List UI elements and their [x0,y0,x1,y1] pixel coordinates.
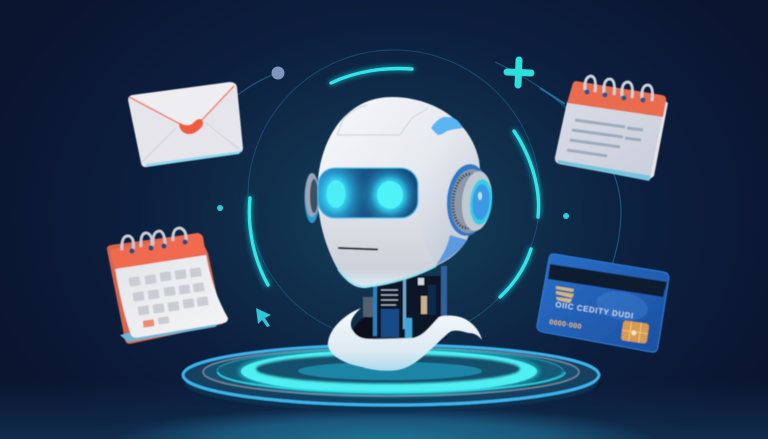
visor eye glow [316,170,412,219]
credit card icon [537,254,669,352]
calendar icon [107,228,228,344]
face plate [319,212,438,288]
left ear [304,173,320,223]
right ear [446,164,493,236]
side blue stripe [436,235,467,265]
notepad icon [555,76,668,181]
left eye [324,177,348,211]
card number: 0000·000 [549,319,582,331]
icon: left glowing dot [217,205,223,211]
card logo [556,286,574,303]
right eye [374,178,406,212]
icon: cursor arrow [256,308,271,327]
jaw glow [338,266,436,287]
blue head panel [431,117,463,135]
card text: OIIC CEDITY DUDI [555,300,634,321]
orbit rings [236,50,621,342]
visor [318,168,418,218]
robot collar [328,308,482,371]
platform [183,345,599,411]
head panel [337,105,428,135]
card chip [621,320,649,344]
envelope icon [128,82,243,167]
robot neck [352,266,447,340]
mouth [338,248,378,250]
head shell [317,97,480,288]
icon: right glowing dot [563,213,569,219]
robot [304,97,495,371]
icon: plus sign [507,60,531,85]
icon: grey orb [272,66,284,80]
